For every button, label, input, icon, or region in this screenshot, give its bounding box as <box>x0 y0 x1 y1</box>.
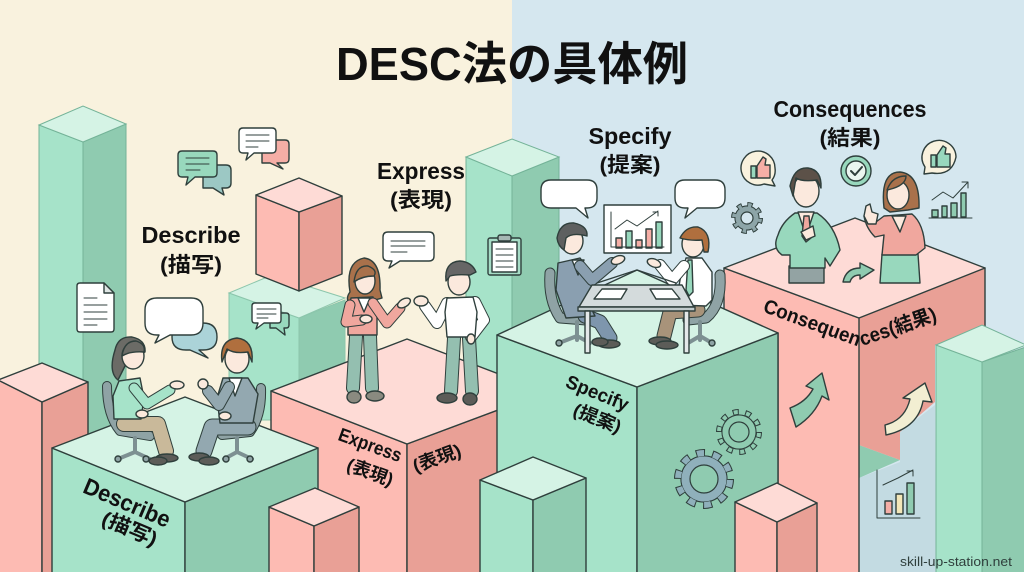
icon: check badge <box>841 156 871 186</box>
person: Specify man <box>550 223 626 348</box>
speech bubbles: Specify <box>541 180 725 218</box>
icon: thumbs up bubble left <box>741 151 775 186</box>
icon: gear small <box>734 205 760 231</box>
heading: Specify: Specify <box>588 123 672 149</box>
person: Express man standing <box>414 261 484 405</box>
icon: document <box>77 283 114 332</box>
face label: Specify <box>563 372 632 437</box>
icon: growth chart upper right <box>929 182 972 218</box>
person: Describe woman on chair <box>107 337 184 465</box>
heading: Consequences: (結果) <box>820 127 880 150</box>
block: Describe platform <box>52 397 318 572</box>
face label: Consequences: ces(結果) <box>856 303 939 351</box>
icon: up arrow cream <box>885 383 932 435</box>
block: Specify platform <box>497 270 778 572</box>
heading: Describe: (描写) <box>160 254 222 277</box>
icon: up arrow on pink face <box>790 373 829 427</box>
face label: Express left <box>335 425 404 490</box>
describe speech bubbles <box>145 298 217 358</box>
block: small pink right <box>735 483 817 572</box>
icon: clipboard <box>488 235 521 275</box>
heading: Describe <box>142 222 240 277</box>
face label: Express right: (表現) <box>410 440 464 476</box>
face label: Describe: Describe <box>80 473 175 533</box>
person: Specify man with tie <box>646 227 720 349</box>
face label: Describe: (描写) <box>98 507 161 551</box>
block: tall green right <box>936 325 1024 572</box>
block: Consequences platform <box>724 218 985 572</box>
back block: tall green left <box>39 106 126 440</box>
block: pink left <box>0 363 88 572</box>
person: Consequences woman <box>864 172 925 283</box>
heading: Consequences: Consequences <box>774 96 926 122</box>
icon: curved arrow on platform <box>843 263 874 282</box>
icon: gear blue <box>678 453 730 505</box>
face label: Specify: (提案) <box>570 399 625 437</box>
person: Express woman standing <box>346 258 412 403</box>
title: DESC法の具体例 <box>336 38 688 90</box>
heading: Express <box>377 158 465 212</box>
floating pink block <box>256 178 342 291</box>
watermark: skill-up-station.net <box>900 554 1012 569</box>
speech bubble: Express <box>383 232 434 268</box>
back block: tall green center <box>466 139 559 400</box>
block: small green center <box>480 457 586 572</box>
icon: white and pink speech bubbles <box>239 128 289 169</box>
back block: green behind describe and express <box>229 275 345 420</box>
face label: Express left: Express <box>335 425 404 467</box>
icon: gear outline <box>719 412 759 452</box>
face label: Consequences <box>760 296 939 351</box>
heading: Consequences <box>774 96 926 150</box>
face label: Express left: (表現) <box>344 455 396 490</box>
person: Consequences man <box>776 168 840 283</box>
icon: thumbs up bubble right <box>922 140 956 174</box>
heading: Specify <box>588 123 672 177</box>
block: small pink center <box>269 488 359 572</box>
heading: Express: Express <box>377 158 465 184</box>
face label: Consequences: Consequen <box>760 296 864 351</box>
block: Express platform <box>271 339 546 572</box>
icon: growth chart lower <box>877 470 920 518</box>
person: Describe man on chair <box>189 338 261 465</box>
chart board <box>604 205 671 253</box>
heading: Express: (表現) <box>390 189 452 212</box>
heading: Describe: Describe <box>142 222 240 248</box>
icon: green speech bubbles <box>178 151 231 195</box>
meeting table <box>578 270 695 353</box>
icon: small speech bubbles <box>252 303 289 335</box>
heading: Specify: (提案) <box>600 154 660 177</box>
face label: Specify: Specify <box>563 372 632 416</box>
